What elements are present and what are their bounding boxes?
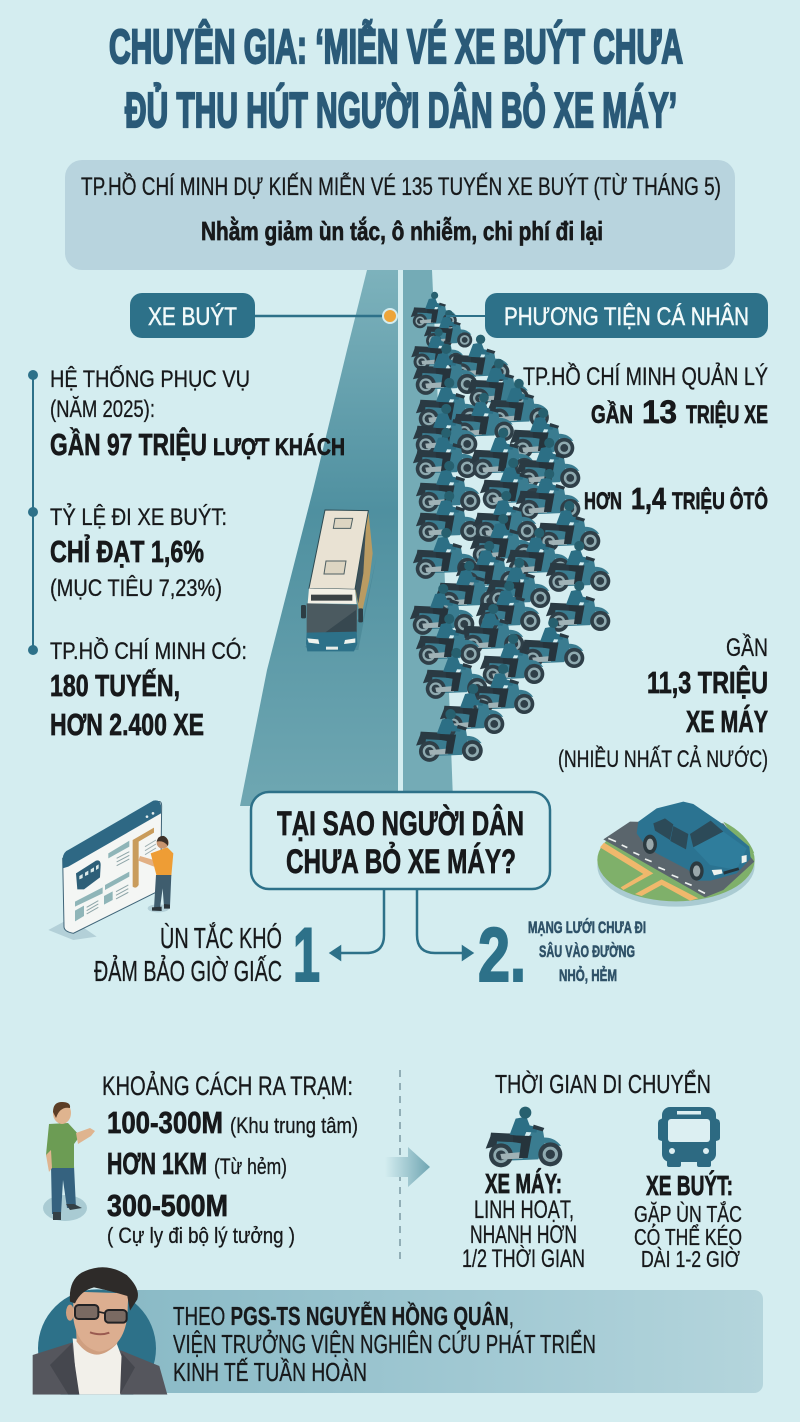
icon: car on road: [597, 802, 755, 907]
timeline: [28, 370, 38, 655]
stat: cars: HƠN: [584, 488, 622, 515]
panel: expert: THEO PGS-TS NGUYỄN HỒNG QUÂN,: [173, 1301, 514, 1331]
reason 2: 2.: [478, 913, 526, 998]
road: bus lane: [240, 270, 398, 806]
reason 2: NHỎ, HẺM: [559, 966, 617, 985]
stat: total vehicles: 13: [642, 394, 677, 430]
text: bus: DÀI 1-2 GIỜ: [641, 1246, 740, 1272]
panel: intro: [65, 160, 735, 270]
stat: passengers: [50, 365, 345, 462]
stat: passengers: LƯỢT KHÁCH: [213, 433, 345, 461]
heading: why: TẠI SAO NGƯỜI DÂN: [277, 805, 524, 843]
stat: cars: 1,4: [631, 481, 667, 516]
text: motorbike: [462, 1168, 585, 1273]
block: distance to stop: (Khu trung tâm): [230, 1113, 358, 1138]
arrow: to reason 2: [417, 889, 472, 959]
reason 2: [478, 913, 646, 998]
heading: why: [251, 792, 550, 889]
label: phương tiện cá nhân: PHƯƠNG TIỆN CÁ NHÂN: [504, 302, 749, 331]
icon: motorbike: [486, 1107, 562, 1167]
block: travel time: [462, 1069, 742, 1273]
reason 1: [94, 913, 320, 998]
block: distance to stop: ( Cự ly đi bộ lý tưởng ): [107, 1223, 295, 1248]
label: xe buýt: [130, 293, 397, 338]
heading: why: CHƯA BỎ XE MÁY?: [286, 843, 516, 881]
stat: cars: [584, 481, 768, 516]
block: distance to stop: 300-500M: [107, 1188, 228, 1223]
stat: motorbikes: GẦN: [726, 633, 768, 662]
arrow: transition: [385, 1147, 430, 1187]
stat: routes: TP.HỒ CHÍ MINH CÓ:: [50, 637, 247, 665]
road: motorbike lane: [403, 270, 453, 800]
text: bus: XE BUÝT:: [646, 1170, 733, 1201]
block: distance to stop: [102, 1069, 358, 1248]
stat: bus share: (MỤC TIÊU 7,23%): [50, 575, 222, 602]
reason 2: SÂU VÀO ĐƯỜNG: [539, 942, 635, 961]
label: phương tiện cá nhân: [446, 293, 768, 338]
reason 1: ĐẢM BẢO GIỜ GIẤC: [94, 954, 282, 988]
label: xe buýt: XE BUÝT: [148, 302, 237, 331]
stat: passengers: HỆ THỐNG PHỤC VỤ: [50, 365, 250, 393]
text: motorbike: NHANH HƠN: [470, 1221, 577, 1249]
reason 1: 1: [293, 913, 320, 998]
title: [109, 19, 683, 138]
text: bus: GẶP ÙN TẮC: [634, 1200, 742, 1227]
portrait: [33, 1267, 167, 1407]
stat: cars: TRIỆU ÔTÔ: [672, 487, 768, 515]
stat: total vehicles: TRIỆU XE: [686, 399, 768, 429]
stat: passengers: (NĂM 2025):: [50, 396, 155, 423]
block: distance to stop: KHOẢNG CÁCH RA TRẠM:: [102, 1069, 353, 1101]
text: motorbike: LINH HOẠT,: [474, 1196, 574, 1224]
stat: routes: 180 TUYẾN,: [50, 668, 180, 703]
icon: motorbike crowd: [410, 292, 610, 762]
icon: bus: [301, 510, 377, 651]
stat: bus share: TỶ LỆ ĐI XE BUÝT:: [50, 502, 227, 531]
block: distance to stop: 100-300M: [107, 1105, 223, 1140]
panel: expert: VIỆN TRƯỞNG VIỆN NGHIÊN CỨU PHÁT TRIỂN: [173, 1328, 596, 1359]
stat: routes: [50, 637, 247, 742]
stat: bus share: CHỈ ĐẠT 1,6%: [50, 534, 204, 569]
block: travel time: THỜI GIAN DI CHUYỂN: [495, 1069, 711, 1099]
reason 1: ÙN TẮC KHÓ: [160, 921, 282, 955]
icon: route map board: [48, 800, 173, 940]
stat: total vehicles: GẦN: [591, 400, 633, 429]
panel: expert: [130, 1290, 763, 1393]
icon: walking person: [43, 1102, 95, 1221]
stat: motorbikes: [558, 633, 768, 773]
reason 2: MẠNG LƯỚI CHƯA ĐI: [528, 918, 646, 937]
panel: intro: Nhằm giảm ùn tắc, ô nhiễm, chi phí đi lại: [201, 216, 603, 246]
stat: routes: HƠN 2.400 XE: [50, 707, 204, 742]
text: bus: CÓ THỂ KÉO: [634, 1223, 742, 1250]
text: bus: [634, 1170, 742, 1272]
panel: expert: KINH TẾ TUẦN HOÀN: [173, 1357, 367, 1387]
arrow: to reason 1: [331, 889, 384, 959]
stat: bus share: [50, 502, 227, 602]
text: motorbike: 1/2 THỜI GIAN: [462, 1244, 585, 1273]
text: motorbike: XE MÁY:: [485, 1168, 562, 1199]
stat: total vehicles: [523, 361, 768, 430]
block: distance to stop: (Từ hẻm): [214, 1154, 287, 1179]
stat: passengers: GẦN 97 TRIỆU: [50, 426, 207, 462]
block: distance to stop: HƠN 1KM: [107, 1146, 207, 1181]
icon: bus front: [658, 1107, 720, 1167]
